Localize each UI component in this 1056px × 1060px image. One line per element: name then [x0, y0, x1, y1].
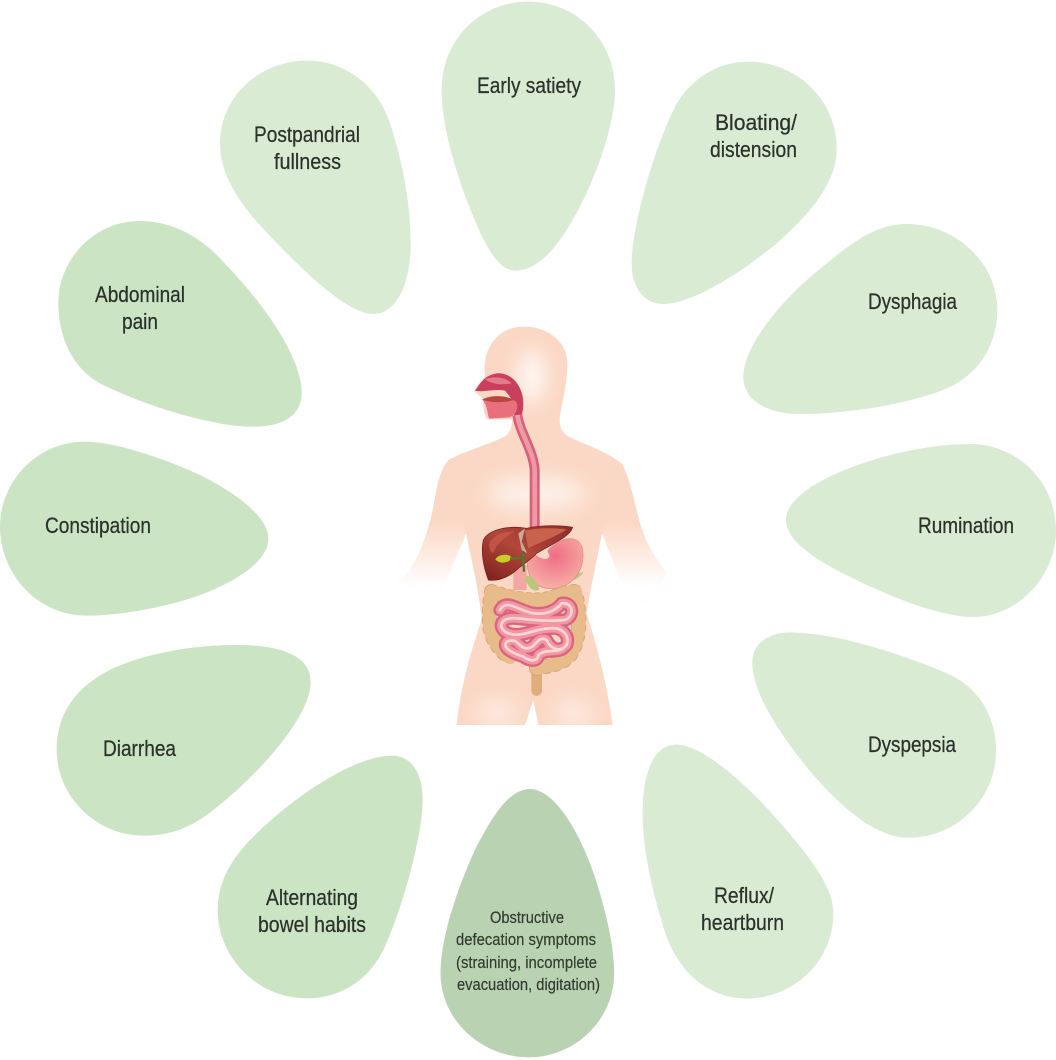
petal: Bloating/distension: [632, 62, 837, 304]
pancreas: [567, 572, 583, 582]
body silhouette: [404, 326, 666, 725]
petal: Bloating/distension: Bloating/: [715, 110, 798, 135]
petal: Postpandrial fullness: [220, 61, 411, 314]
petal: Reflux/heartburn: [643, 745, 833, 999]
petal: Early satiety: Early satiety: [477, 73, 581, 98]
stomach: [527, 539, 583, 589]
petal: Dysphagia: Dysphagia: [868, 289, 958, 314]
gallbladder and bile ducts: [495, 552, 539, 590]
petal: Alternating bowel habits: [218, 756, 423, 998]
petal: Postpandrial fullness: fullness: [274, 149, 341, 174]
petal: Reflux/heartburn: Reflux/: [714, 883, 775, 908]
petal: Abdominal pain: Abdominal: [95, 282, 185, 307]
petal: Dyspepsia: [752, 633, 996, 838]
esophagus: [517, 415, 535, 528]
illustration: human digestive system: [404, 326, 666, 725]
petal: Early satiety: [442, 2, 615, 271]
petal: Dyspepsia: Dyspepsia: [868, 732, 957, 757]
petal: Constipation: [0, 442, 268, 616]
petal: Diarrhea: Diarrhea: [103, 736, 177, 761]
petal: Diarrhea: [57, 645, 311, 836]
duodenum: [513, 565, 527, 590]
petal: Alternating bowel habits: Alternating: [266, 885, 358, 910]
petal: Rumination: Rumination: [918, 513, 1014, 538]
petal: Alternating bowel habits: bowel habits: [258, 912, 366, 937]
petal: Abdominal pain: [58, 221, 302, 427]
large intestine: [489, 592, 579, 691]
petal: Constipation: Constipation: [45, 513, 151, 538]
petal: Reflux/heartburn: heartburn: [701, 910, 784, 935]
nasal and oral cavity: [475, 373, 523, 419]
petal: Postpandrial fullness: Postpandrial: [254, 122, 360, 147]
petal: Bloating/distension: distension: [710, 137, 797, 162]
petal: Obstructive defecation symptoms: [440, 789, 614, 1057]
petal: Obstructive defecation symptoms: defecation symptoms: [456, 930, 596, 949]
petal: Abdominal pain: pain: [122, 309, 158, 334]
petal: Obstructive defecation symptoms: Obstructive: [490, 908, 564, 927]
liver: [482, 526, 573, 580]
small intestine: [500, 603, 572, 660]
petal: Dysphagia: [743, 224, 997, 414]
petal: Rumination: [786, 444, 1056, 617]
petal: Obstructive defecation symptoms: (straining, incomplete: [456, 953, 597, 972]
petal: Obstructive defecation symptoms: evacuation, digitation): [457, 975, 600, 994]
